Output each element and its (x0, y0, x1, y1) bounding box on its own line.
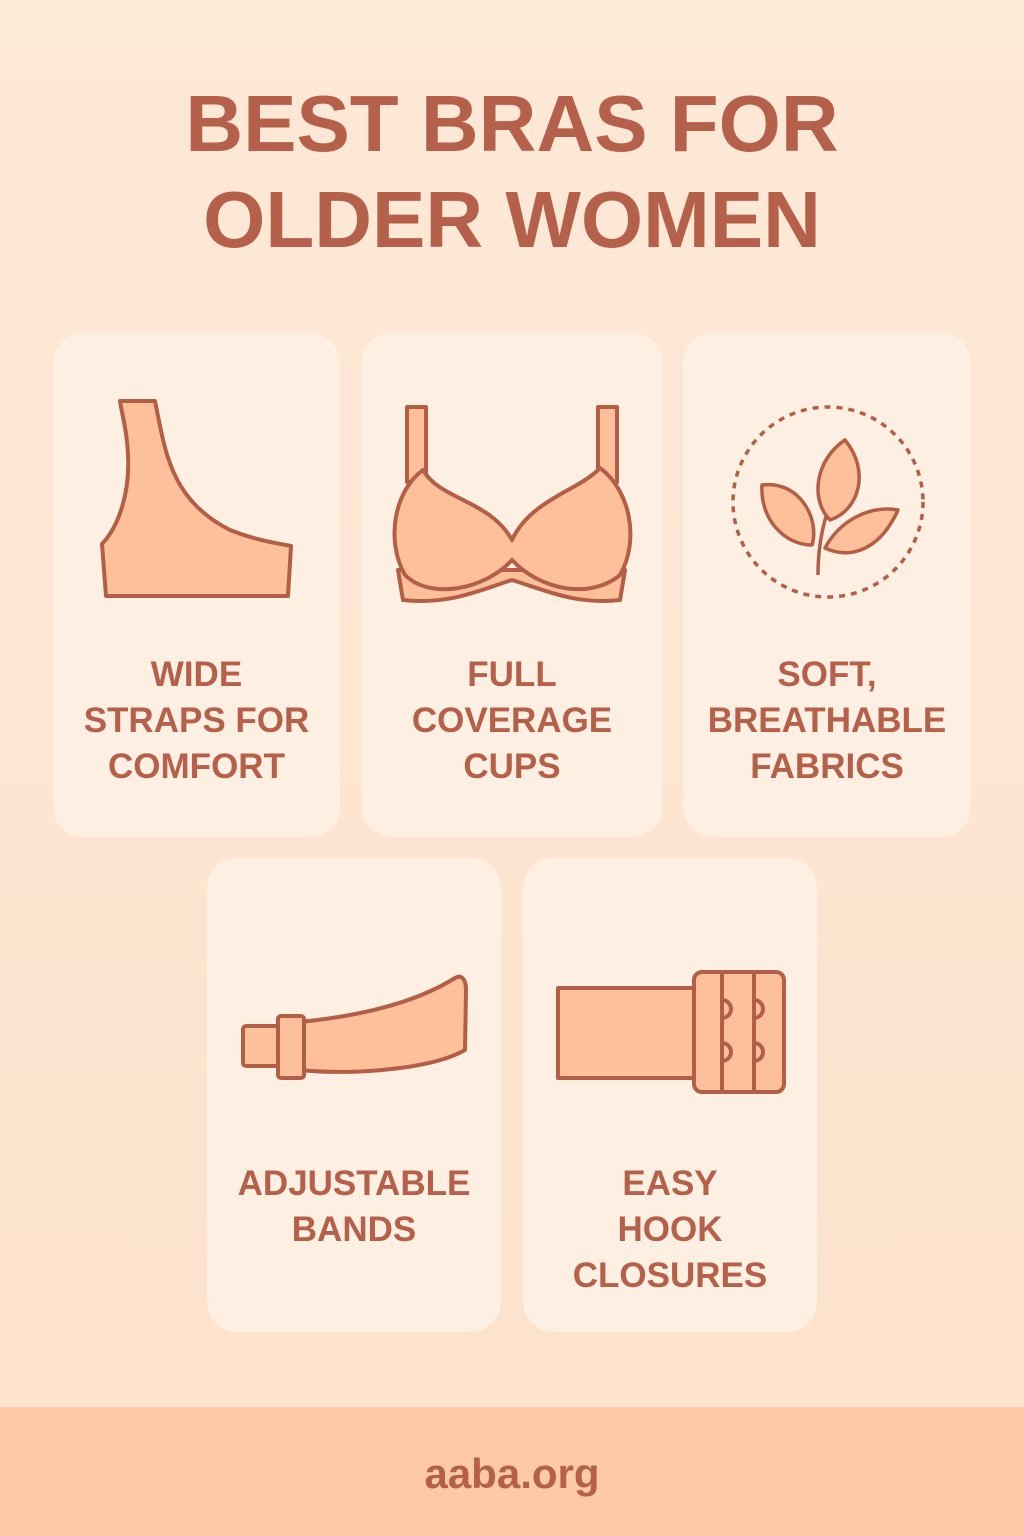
panel: adjustable bands (207, 858, 501, 1332)
label: SOFT, (777, 655, 877, 694)
label (708, 655, 946, 786)
label (412, 655, 612, 786)
label: FABRICS (750, 747, 904, 786)
label: CUPS (463, 747, 561, 786)
footer text: aaba.org (424, 1450, 600, 1497)
icon: hook (556, 970, 786, 1094)
panel: full coverage (362, 333, 662, 837)
icon: band (241, 974, 468, 1080)
label: FULL (467, 655, 557, 694)
label: HOOK (618, 1210, 722, 1249)
title: OLDER WOMEN (203, 175, 821, 264)
label: WIDE (151, 655, 242, 694)
icon: leaves (731, 405, 925, 599)
label: BANDS (292, 1210, 416, 1249)
label (84, 655, 309, 786)
label: BREATHABLE (708, 701, 946, 740)
label: STRAPS FOR (84, 701, 309, 740)
icon: bra cups (392, 405, 632, 603)
panel: wide straps (53, 333, 340, 837)
panel: soft fabrics (683, 333, 971, 837)
label: COVERAGE (412, 701, 612, 740)
title (185, 79, 839, 264)
label: ADJUSTABLE (238, 1164, 470, 1203)
title: BEST BRAS FOR (185, 79, 839, 168)
label: EASY (622, 1164, 718, 1203)
label: COMFORT (108, 747, 285, 786)
label (573, 1164, 767, 1295)
panel: hook closures (523, 858, 817, 1332)
label (238, 1164, 470, 1249)
icon: strap bra (100, 399, 293, 598)
footer (0, 1407, 1024, 1536)
label: CLOSURES (573, 1256, 767, 1295)
